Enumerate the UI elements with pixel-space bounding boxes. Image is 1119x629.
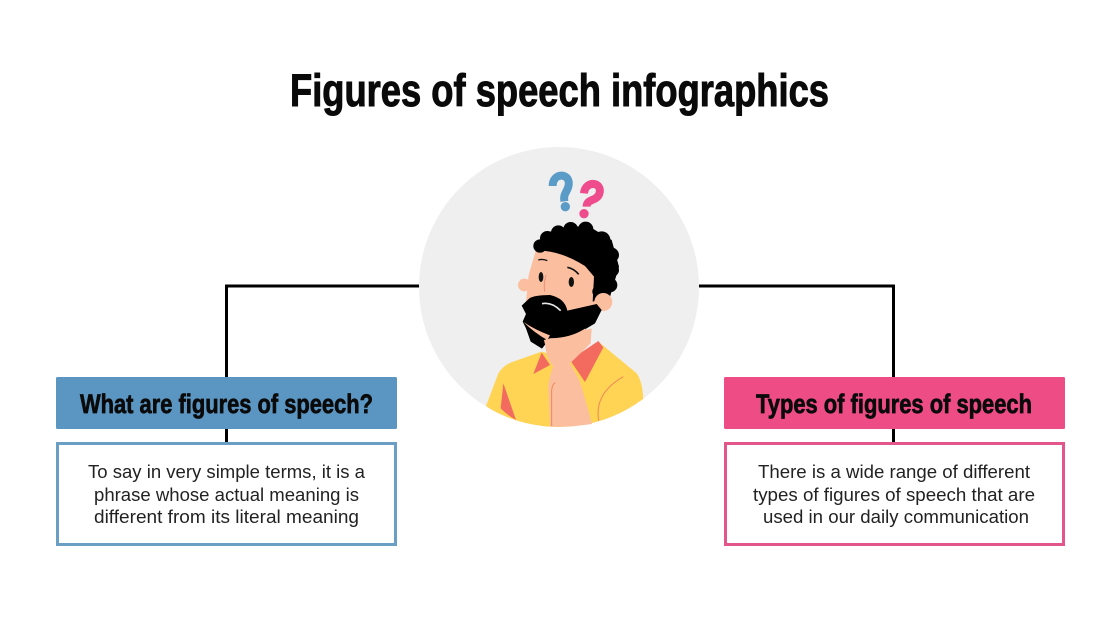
panel: types of figures of speech	[724, 377, 1065, 544]
icon: blue question mark	[553, 176, 570, 211]
text box: pink outline	[726, 444, 1064, 544]
body text: left: different from its literal meaning	[94, 507, 359, 527]
face	[526, 250, 600, 327]
shirt placket	[552, 383, 555, 426]
heading: right: Types of figures of speech	[756, 389, 1032, 419]
heading bar: blue	[56, 377, 397, 429]
shirt details	[501, 341, 623, 421]
body text: left: phrase whose actual meaning is	[94, 485, 359, 505]
icon: pink question mark	[579, 184, 600, 218]
neck and arm	[545, 328, 592, 427]
circle backdrop	[419, 147, 699, 427]
title: Figures of speech infographics	[290, 65, 829, 116]
text box: blue outline	[58, 444, 396, 544]
hair	[533, 222, 619, 302]
body text: left: To say in very simple terms, it is a	[88, 462, 366, 482]
body text: right: There is a wide range of different	[758, 462, 1030, 482]
connector: left	[226, 286, 419, 442]
facial features	[538, 259, 579, 292]
palm	[544, 329, 589, 363]
nose bump	[518, 279, 531, 291]
body text: right: types of figures of speech that are	[753, 485, 1035, 505]
beard	[522, 295, 602, 349]
connector: right	[699, 286, 894, 442]
body text: right	[753, 462, 1035, 527]
moustache highlight	[542, 303, 561, 311]
ear	[594, 293, 612, 311]
shirt	[486, 342, 643, 427]
finger under beard	[523, 322, 550, 340]
heading: left: What are figures of speech?	[80, 389, 373, 419]
heading bar: pink	[724, 377, 1065, 429]
panel: what are figures of speech	[56, 377, 397, 544]
body text: left	[88, 462, 366, 527]
illustration: thinking man	[486, 176, 643, 427]
body text: right: used in our daily communication	[763, 507, 1029, 527]
